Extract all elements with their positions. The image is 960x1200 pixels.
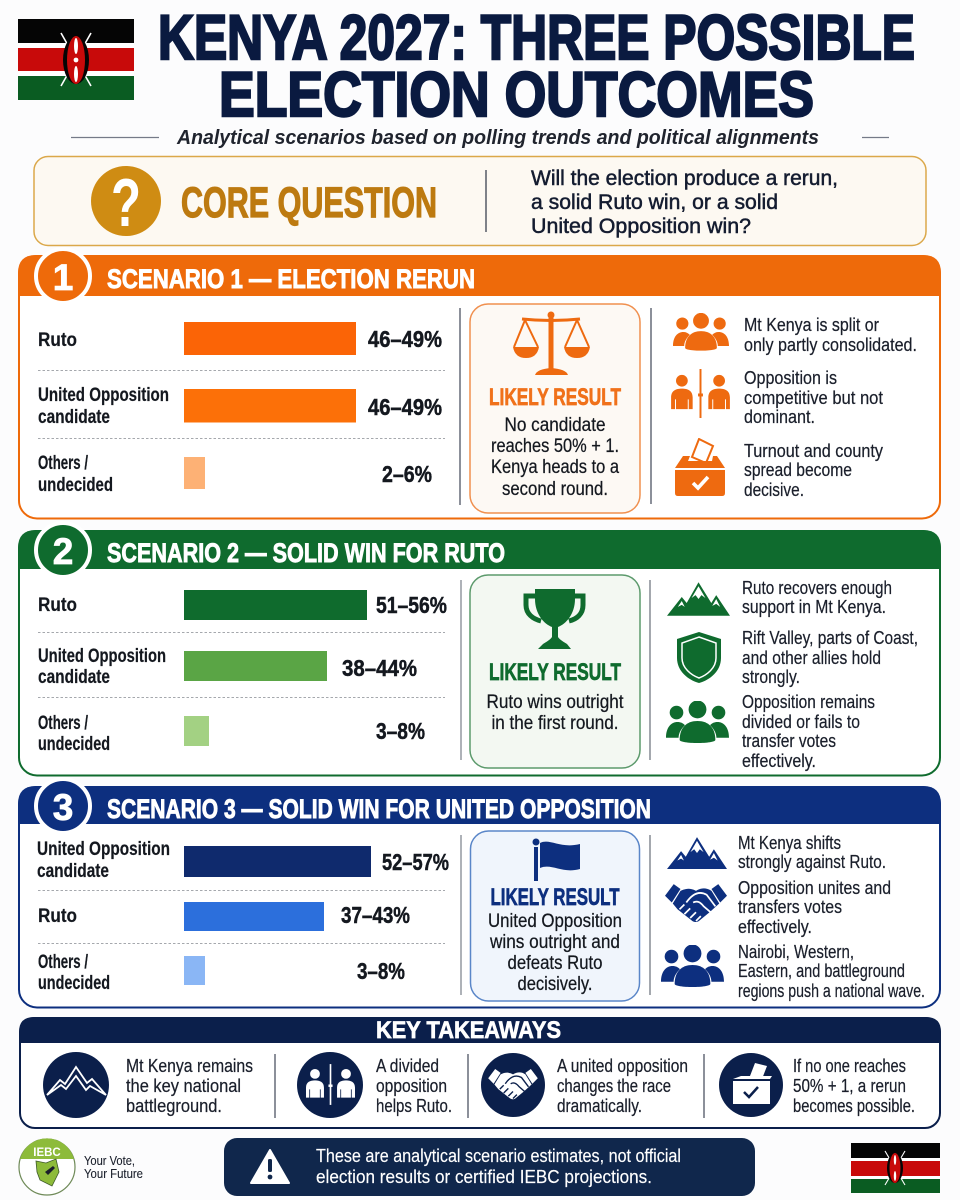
bar chart: scenario 2: 3–8%	[376, 718, 425, 744]
bar chart: scenario 3: 52–57%	[382, 849, 449, 875]
takeaway 4: 50% + 1, a rerun	[793, 1076, 906, 1096]
icon: scales	[513, 312, 590, 375]
factor text 1	[742, 578, 892, 617]
factor text 1: Mt Kenya is split or	[744, 315, 879, 335]
bar chart: scenario 3	[37, 839, 449, 994]
factor text 3: Eastern, and battleground	[738, 961, 905, 981]
header: key takeaways: KEY TAKEAWAYS	[376, 1017, 561, 1044]
bar chart: scenario 3: candidate	[37, 861, 109, 882]
takeaway 2: helps Ruto.	[376, 1096, 452, 1116]
factors: scenario 1	[671, 313, 917, 500]
core question text: a solid Ruto win, or a solid	[531, 191, 778, 214]
takeaway 2: opposition	[376, 1076, 447, 1096]
bar chart: scenario 2: 51–56%	[376, 592, 447, 618]
bar chart: scenario 1: 46–49%	[368, 394, 442, 420]
likely result: scenario 2: LIKELY RESULT	[489, 659, 621, 686]
icon: people	[666, 700, 729, 743]
likely result: scenario 1: second round.	[502, 479, 608, 500]
factor text 1: only partly consolidated.	[744, 335, 917, 355]
logo tagline: Your Vote,	[84, 1154, 135, 1168]
panel: key takeaways	[19, 1017, 941, 1128]
bar chart: scenario 1: Ruto	[38, 330, 77, 351]
core question text: Will the election produce a rerun,	[531, 167, 838, 190]
bar chart: scenario 1: undecided	[38, 475, 113, 496]
likely result: scenario 3: LIKELY RESULT	[490, 884, 620, 911]
likely result: scenario 2: Ruto wins outright	[486, 692, 624, 713]
bar chart: scenario 1: 46–49%	[368, 326, 442, 352]
likely result: scenario 1: reaches 50% + 1.	[491, 436, 619, 457]
bar chart: scenario 3: 3–8%	[357, 958, 405, 984]
factor text 2: Opposition unites and	[738, 878, 891, 898]
icon: Kenya flag top	[18, 19, 134, 100]
likely result: scenario 3: wins outright and	[489, 932, 620, 953]
factor text 2: competitive but not	[744, 388, 883, 408]
likely result: scenario 1: No candidate	[504, 415, 606, 436]
takeaway 3	[481, 1053, 688, 1117]
bar chart: scenario 1	[38, 322, 445, 496]
callout: disclaimer	[224, 1138, 755, 1196]
icon: question mark	[91, 165, 161, 241]
header: scenario 3: SCENARIO 3 — SOLID WIN FOR UNITED OPPOSITION	[107, 794, 651, 824]
factor text 2: transfers votes	[738, 897, 842, 917]
takeaway 3: changes the race	[557, 1076, 671, 1096]
logo tagline: Your Future	[84, 1167, 143, 1181]
factor text 2: Opposition is	[744, 368, 837, 388]
header: scenario 3	[18, 779, 941, 833]
takeaway 4	[719, 1053, 915, 1117]
callout: disclaimer: election results or certified IEBC projections.	[316, 1167, 652, 1187]
factors: scenario 3	[661, 833, 925, 1001]
factor text 3	[738, 942, 925, 1001]
factor text 3: transfer votes	[742, 731, 836, 751]
bar chart: scenario 2: Others /	[38, 713, 88, 734]
bar chart: scenario 1: Others /	[38, 453, 88, 474]
factors: scenario 2	[666, 578, 918, 771]
likely result: scenario 3: United Opposition	[488, 911, 622, 932]
heading: core question: CORE QUESTION	[181, 179, 437, 227]
icon: ballot box	[675, 439, 725, 496]
callout: disclaimer: These are analytical scenario estimates, not official	[316, 1146, 681, 1166]
panel: scenario 1	[18, 249, 941, 518]
takeaway 1: battleground.	[126, 1096, 222, 1116]
factor text 1: strongly against Ruto.	[738, 852, 886, 872]
likely result: scenario 1	[470, 304, 640, 513]
bar chart: scenario 2: 38–44%	[342, 655, 417, 681]
takeaway 3: A united opposition	[557, 1056, 688, 1076]
panel: scenario 3	[18, 779, 941, 1008]
factor text 2: Rift Valley, parts of Coast,	[742, 628, 918, 648]
core question text	[531, 167, 838, 238]
icon: question mark: ?	[111, 165, 141, 241]
logo tagline	[84, 1154, 143, 1181]
icon: mountain	[667, 582, 730, 616]
takeaway 1: Mt Kenya remains	[126, 1056, 253, 1076]
bar chart: scenario 3: United Opposition	[37, 839, 170, 860]
bar chart: scenario 2	[38, 590, 447, 755]
header: scenario 1: SCENARIO 1 — ELECTION RERUN	[107, 264, 475, 294]
title: ELECTION OUTCOMES	[219, 60, 814, 130]
factor text 3: decisive.	[744, 480, 804, 500]
icon: Kenya flag bottom	[851, 1143, 940, 1193]
bar chart: scenario 2: undecided	[38, 734, 110, 755]
icon: shield	[677, 632, 721, 683]
bar chart: scenario 1: United Opposition	[38, 385, 169, 406]
factor text 2: and other allies hold	[742, 648, 881, 668]
factor text 2	[744, 368, 883, 427]
factor text 3	[742, 692, 875, 771]
factor text 3: spread become	[744, 460, 852, 480]
factor text 1: support in Mt Kenya.	[742, 597, 886, 617]
factor text 1	[744, 315, 917, 355]
bar chart: scenario 2: Ruto	[38, 595, 77, 616]
header: key takeaways	[19, 1017, 941, 1044]
likely result: scenario 3: decisively.	[518, 974, 592, 995]
title	[158, 3, 915, 130]
core question text: United Opposition win?	[531, 215, 751, 238]
icon: trophy	[526, 589, 583, 649]
factor text 3: Opposition remains	[742, 692, 875, 712]
factor text 1: Mt Kenya shifts	[738, 833, 841, 853]
subtitle: Analytical scenarios based on polling trends and political alignments	[176, 127, 819, 149]
icon: flag	[532, 838, 580, 881]
factor text 3	[744, 441, 883, 500]
likely result: scenario 1: Kenya heads to a	[491, 457, 619, 478]
icon: mountain	[667, 837, 727, 869]
bar chart: scenario 3: Others /	[38, 952, 88, 973]
likely result: scenario 1: LIKELY RESULT	[489, 384, 621, 411]
header: scenario 1: 1	[53, 257, 73, 298]
bar chart: scenario 3: Ruto	[38, 906, 77, 927]
takeaway 2	[297, 1052, 452, 1118]
bar chart: scenario 2: United Opposition	[38, 646, 166, 667]
likely result: scenario 3	[470, 831, 640, 1001]
takeaway 1: the key national	[126, 1076, 241, 1096]
takeaway 3: dramatically.	[557, 1096, 642, 1116]
likely result: scenario 2: in the first round.	[492, 713, 618, 734]
bar chart: scenario 3: 37–43%	[341, 902, 410, 928]
icon: divided people	[671, 369, 730, 418]
likely result: scenario 3: defeats Ruto	[508, 953, 602, 974]
header: scenario 2	[18, 523, 941, 577]
factor text 3: effectively.	[742, 751, 816, 771]
panel: scenario 2	[18, 523, 941, 776]
factor text 1	[738, 833, 886, 872]
icon: IEBC logo	[19, 1138, 75, 1195]
header: scenario 2: 2	[53, 531, 73, 572]
factor text 2	[742, 628, 918, 687]
panel: core question	[34, 156, 926, 246]
bar chart: scenario 1: 2–6%	[382, 461, 432, 487]
bar chart: scenario 2: candidate	[38, 667, 110, 688]
icon: handshake	[665, 884, 727, 922]
icon: people	[661, 944, 724, 987]
takeaway 4: If no one reaches	[793, 1056, 906, 1076]
factor text 2: dominant.	[744, 407, 815, 427]
factor text 3: divided or fails to	[742, 712, 860, 732]
icon: warning	[251, 1150, 289, 1183]
likely result: scenario 2	[470, 575, 640, 768]
takeaway 2: A divided	[376, 1056, 439, 1076]
factor text 2: effectively.	[738, 917, 812, 937]
icon: people	[673, 313, 729, 351]
takeaway 1	[43, 1052, 253, 1118]
takeaway 4: becomes possible.	[793, 1096, 915, 1116]
bar chart: scenario 1: candidate	[38, 407, 110, 428]
bar chart: scenario 3: undecided	[38, 973, 110, 994]
factor text 2: strongly.	[742, 667, 800, 687]
header: scenario 3: 3	[53, 787, 73, 828]
factor text 2	[738, 878, 891, 937]
header: scenario 2: SCENARIO 2 — SOLID WIN FOR RUTO	[107, 538, 505, 568]
header: scenario 1	[18, 249, 941, 303]
icon: IEBC logo: IEBC	[33, 1147, 61, 1159]
factor text 3: Turnout and county	[744, 441, 883, 461]
factor text 3: Nairobi, Western,	[738, 942, 854, 962]
factor text 1: Ruto recovers enough	[742, 578, 892, 598]
